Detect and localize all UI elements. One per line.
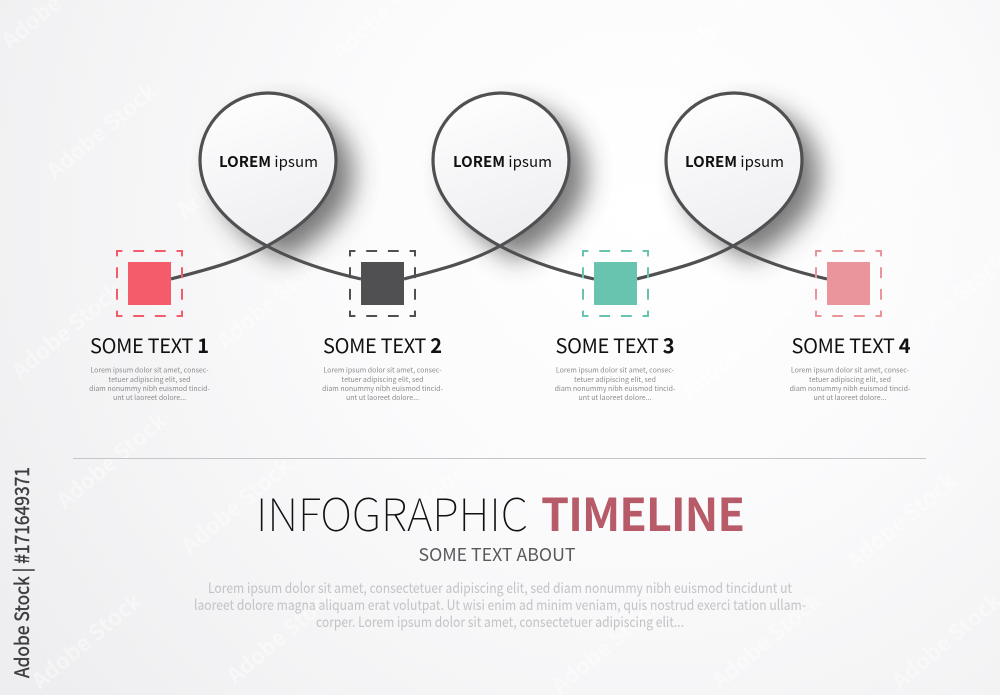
watermark pattern: Adobe Stock [23, 584, 148, 695]
step 1 description: tetuer adipiscing elit, sed [109, 375, 190, 385]
step 2 heading: SOME TEXT 2 [323, 330, 442, 359]
circle label 3: LOREM ipsum [685, 151, 784, 172]
circle label 1: LOREM ipsum [219, 151, 318, 172]
step 3 description: tetuer adipiscing elit, sed [574, 375, 656, 385]
watermark pattern: Adobe Stock [703, 89, 828, 201]
watermark pattern: Adobe Stock [38, 74, 163, 186]
step 4 description [790, 366, 911, 403]
step 4 description: tetuer adipiscing elit, sed [809, 375, 891, 385]
title: INFOGRAPHIC [256, 479, 528, 544]
step 2 description: Lorem ipsum dolor sit amet, consec- [323, 366, 442, 376]
watermark pattern: Adobe Stock [173, 449, 298, 561]
connector shadows [217, 107, 819, 260]
marker 2: dark square [350, 251, 415, 316]
title [256, 479, 745, 544]
stock id side label: Adobe Stock | #171649371 [6, 467, 35, 678]
watermark pattern: Adobe Stock [168, 114, 293, 226]
subtitle: SOME TEXT ABOUT [418, 541, 576, 567]
step 3 description: Lorem ipsum dolor sit amet, consec- [556, 366, 675, 376]
step 4 description: Lorem ipsum dolor sit amet, consec- [791, 366, 910, 376]
marker 3: teal square [583, 251, 648, 316]
step 2 description [322, 366, 443, 403]
circle label 2: LOREM ipsum [453, 151, 552, 172]
step 2 description: diam nonummy nibh euismod tincid- [322, 384, 443, 394]
watermark pattern: Adobe Stock [218, 579, 343, 691]
watermark pattern: Adobe Stock [373, 84, 498, 196]
watermark pattern: Adobe Stock [838, 464, 963, 576]
step 1 heading: SOME TEXT 1 [90, 330, 209, 359]
title: TIMELINE [541, 479, 745, 544]
marker 4: pink square [816, 251, 881, 316]
step 1 description: diam nonummy nibh euismod tincid- [89, 384, 210, 394]
watermark pattern: Adobe Stock [3, 274, 128, 386]
intro paragraph: corper. Lorem ipsum dolor sit amet, consectetuer adipiscing elit... [316, 612, 684, 632]
looping timeline line [171, 93, 827, 279]
step 2 description: tetuer adipiscing elit, sed [342, 375, 423, 385]
watermark pattern: Adobe Stock [703, 584, 828, 695]
step 3 heading: SOME TEXT 3 [556, 330, 674, 359]
intro paragraph [194, 578, 806, 632]
step 1 description [89, 366, 210, 403]
step 3 description: diam nonummy nibh euismod tincid- [555, 384, 676, 394]
step 4 description: unt ut laoreet dolore... [813, 393, 887, 403]
watermark pattern: Adobe Stock [673, 294, 798, 406]
step 1 description: unt ut laoreet dolore... [113, 393, 186, 403]
marker 1: red square [117, 251, 182, 316]
step 3 description: unt ut laoreet dolore... [578, 393, 652, 403]
watermark pattern: Adobe Stock [48, 404, 173, 516]
step 1 description: Lorem ipsum dolor sit amet, consec- [90, 366, 209, 376]
watermark pattern: Adobe Stock [828, 134, 953, 246]
intro paragraph: laoreet dolore magna aliquam erat volutpat. Ut wisi enim ad minim veniam, quis nostrud exerci tation ullam- [194, 595, 806, 615]
step 4 description: diam nonummy nibh euismod tincid- [790, 384, 911, 394]
intro paragraph: Lorem ipsum dolor sit amet, consectetuer adipiscing elit, sed diam nonummy nibh euismod tincidunt ut [208, 578, 793, 598]
teardrop fills [200, 93, 802, 246]
step 2 description: unt ut laoreet dolore... [346, 393, 419, 403]
watermark pattern: Adobe Stock [208, 244, 333, 356]
step 4 heading: SOME TEXT 4 [792, 330, 911, 359]
step 3 description [555, 366, 676, 403]
watermark pattern: Adobe Stock [398, 414, 523, 526]
